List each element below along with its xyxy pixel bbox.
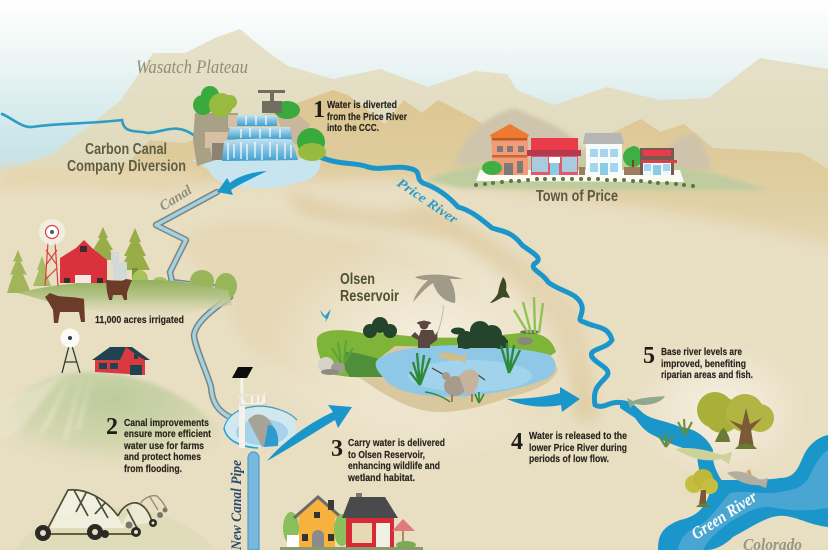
label: step 2: and protect homes [124, 451, 201, 463]
icon: goose [413, 275, 463, 303]
central sand plateau [175, 220, 560, 420]
label: Carbon Canal Company Diversion: Company Diversion [67, 158, 186, 175]
white building [583, 133, 624, 144]
lobe left of the Price River [285, 190, 600, 420]
label: Olsen Reservoir [340, 271, 399, 305]
trees [7, 250, 31, 293]
fish [437, 352, 466, 363]
label: step 3: wetland habitat. [347, 472, 415, 484]
diversion dam [192, 86, 326, 188]
backdrop hills [455, 108, 590, 165]
orange building [491, 135, 528, 175]
hedge dots [474, 177, 695, 188]
label: step 4 [511, 429, 627, 465]
water [376, 345, 556, 397]
Olsen Reservoir scene [317, 297, 558, 412]
lower Price River into Green River [620, 400, 724, 484]
dark bushes [363, 317, 508, 349]
barn [92, 347, 150, 360]
label: step 3: Carry water is delivered [348, 437, 445, 449]
label: Town of Price: Town of Price [536, 188, 618, 205]
label: step 3: enhancing wildlife and [348, 460, 440, 472]
label: step 2: water use for farms [123, 440, 204, 452]
windmill [45, 242, 58, 286]
riverside trees and reeds [659, 392, 774, 507]
white plaza [476, 170, 684, 182]
New Canal Pipe [248, 452, 259, 550]
farm with barn and cows [7, 219, 237, 323]
label: step 2: from flooding. [124, 463, 182, 475]
red shop [531, 138, 578, 151]
small shop [640, 148, 674, 175]
label: step 5: riparian areas and fish. [661, 369, 753, 381]
canal gate structure [223, 367, 297, 448]
windmill [62, 346, 80, 373]
rock wall right [277, 112, 310, 145]
label: Carbon Canal Company Diversion: Carbon Canal [85, 141, 167, 158]
label: step 2 [106, 414, 211, 475]
upper left sand band [0, 167, 210, 192]
farm hill with small barn [0, 328, 225, 480]
label: Olsen Reservoir: Olsen [340, 271, 375, 288]
label: step 1 [313, 97, 407, 134]
label: step 4: periods of low flow. [529, 453, 609, 465]
sky [0, 0, 828, 190]
silos [111, 252, 127, 280]
pool [192, 158, 320, 188]
green tree [623, 147, 643, 167]
cow [45, 293, 85, 323]
label: Canal: Canal [157, 183, 195, 214]
icon: small blue bird [320, 309, 331, 322]
label: step 1: 1 [313, 97, 325, 123]
reed tufts [332, 340, 353, 363]
label: step 1: Water is diverted [327, 99, 397, 111]
house and shop [280, 493, 423, 550]
label: Green River: Green River [688, 487, 761, 543]
rock wall left [193, 113, 238, 166]
sand rim [323, 345, 558, 412]
label: 11,000 acres irrigated: 11,000 acres irrigated [95, 314, 184, 326]
rocks [318, 357, 334, 373]
icon: hawk [490, 277, 510, 303]
Canal [156, 192, 232, 418]
label: step 2: ensure more efficient [124, 428, 211, 440]
Price River upper segment [2, 114, 195, 136]
desert ground [0, 170, 828, 400]
label: Carbon Canal Company Diversion [67, 141, 186, 175]
arrow 1: diversion to canal [217, 171, 267, 195]
arrow 3: pipe to reservoir [267, 405, 352, 461]
green banks [317, 330, 556, 377]
pale glow around green river trees [630, 340, 810, 480]
hill [18, 280, 232, 320]
cow [106, 279, 132, 300]
lower ground fill [0, 340, 828, 550]
fences [579, 167, 640, 175]
label: step 2: 2 [106, 414, 118, 440]
Price River [320, 157, 636, 410]
label: Price River: Price River [394, 175, 461, 227]
fisherman [411, 305, 443, 348]
label: New Canal Pipe: New Canal Pipe [229, 459, 245, 550]
wading bird [425, 368, 485, 403]
label: step 5: 5 [643, 343, 655, 369]
label: step 5: improved, benefiting [661, 358, 746, 370]
fish in river [627, 396, 768, 488]
Town of Price [425, 108, 770, 190]
label: step 5: Base river levels are [661, 346, 742, 358]
barn [60, 240, 107, 283]
pale glow around reservoir [260, 235, 600, 465]
label: Wasatch Plateau: Wasatch Plateau [136, 57, 248, 78]
pivot irrigation [15, 490, 215, 550]
label: step 3 [331, 436, 445, 484]
label: step 4: Water is released to the [529, 430, 627, 442]
label: step 3: 3 [331, 436, 343, 462]
label: step 4: lower Price River during [529, 442, 627, 454]
label: step 5 [643, 343, 753, 381]
label: step 1: from the Price River [327, 111, 407, 123]
valve [258, 90, 285, 113]
label: step 4: 4 [511, 429, 523, 455]
front mountain ridge [110, 90, 828, 300]
waterfall tiers [237, 115, 277, 126]
arrow 4: reservoir to river [507, 387, 580, 412]
solar panel [232, 367, 253, 378]
back mountain ridge [0, 29, 828, 250]
label: step 1: into the CCC. [327, 122, 379, 134]
label: step 2: Canal improvements [124, 417, 209, 429]
bushes [193, 95, 213, 115]
label: Olsen Reservoir: Reservoir [340, 288, 399, 305]
Green River [658, 435, 828, 550]
label: step 3: to Olsen Reservoir, [348, 449, 425, 461]
